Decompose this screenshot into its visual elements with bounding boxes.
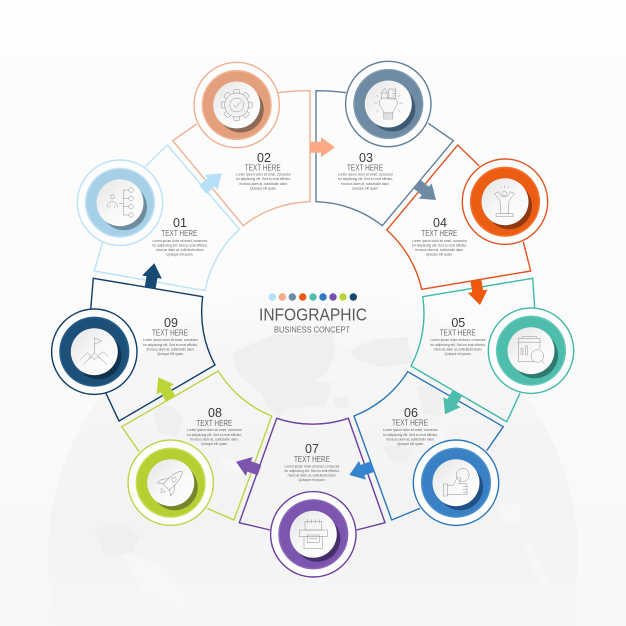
text 05: Quisque elit quam. <box>444 352 472 356</box>
text 01 <box>152 216 208 257</box>
text 09 <box>143 316 199 356</box>
icon: mountain with flag <box>80 338 108 365</box>
outline 09 <box>91 278 215 421</box>
text 04: tur adipiscing elit. Sed eu erat efficitur, <box>412 244 467 248</box>
text 08 <box>187 406 243 446</box>
ring 09 <box>52 309 137 394</box>
arrow 03 <box>410 176 442 208</box>
outline 04 <box>387 145 531 289</box>
text 05: tur adipiscing elit. Sed eu erat efficitur, <box>430 343 486 347</box>
arrow 02 <box>310 137 335 157</box>
outline 02 <box>173 91 310 226</box>
outline 05 <box>411 278 535 422</box>
text 09: tur adipiscing elit. Sed eu erat efficitur, <box>143 343 198 347</box>
text 06: TEXT HERE <box>392 419 428 428</box>
text 06: 06 <box>404 406 418 420</box>
text 08: 08 <box>208 406 222 420</box>
outline 06 <box>354 372 503 520</box>
icon: person on podium <box>494 186 514 217</box>
text 04: 04 <box>433 216 447 230</box>
text 06: Quisque elit quam. <box>397 442 424 446</box>
text 03: TEXT HERE <box>347 164 383 173</box>
text 04 <box>412 216 468 257</box>
ring 04 <box>462 159 548 244</box>
text 07: TEXT HERE <box>294 455 330 464</box>
text 01: tur adipiscing elit. Sed eu erat efficitur, <box>152 244 208 248</box>
text 06 <box>383 406 439 446</box>
arrow 09 <box>140 262 164 290</box>
colour dots <box>269 293 357 301</box>
text 04: Lorem ipsum dolor sit amet, consectur <box>412 239 468 243</box>
text 05: 05 <box>451 316 465 330</box>
panel 02 <box>173 62 310 226</box>
ring 08 <box>128 440 213 525</box>
arrow 01 <box>196 166 228 197</box>
arrow 05 <box>436 388 466 419</box>
text 02 <box>236 151 292 190</box>
text 04: Quisque elit quam. <box>426 253 453 257</box>
text 03: Quisque elit quam. <box>352 186 379 190</box>
text 02: Quisque elit quam. <box>250 186 277 190</box>
arrow 06 <box>346 457 376 484</box>
icon: report with magnifier <box>518 337 544 364</box>
text 02: Lorem ipsum dolor sit amet, consectur <box>236 173 292 177</box>
text 06: rhoncus diam at, sollicitudin diam. <box>386 437 435 441</box>
text 08: TEXT HERE <box>196 419 232 428</box>
text 01: 01 <box>173 216 187 230</box>
text 08: tur adipiscing elit. Sed eu erat efficitur, <box>187 433 242 437</box>
text 03 <box>338 151 394 190</box>
text 02: 02 <box>257 151 271 165</box>
text 03: tur adipiscing elit. Sed eu erat efficitur, <box>338 177 393 181</box>
text 07: tur adipiscing elit. Sed eu erat efficitur, <box>284 469 340 473</box>
panel 04 <box>387 145 548 289</box>
text 09: rhoncus diam at, sollicitudin diam. <box>146 347 195 351</box>
text 08: Quisque elit quam. <box>201 442 228 446</box>
outline 08 <box>122 371 272 520</box>
text 07: rhoncus diam at, sollicitudin diam. <box>288 474 336 478</box>
text 03: 03 <box>359 151 373 165</box>
outline 01 <box>94 145 239 291</box>
ring 07 <box>271 492 356 577</box>
ring 03 <box>346 61 431 147</box>
icon: calendar organiser <box>299 519 327 548</box>
text 07: 07 <box>305 442 319 456</box>
text 09: Quisque elit quam. <box>157 352 184 356</box>
text 02: tur adipiscing elit. Sed eu erat efficitur, <box>236 177 291 181</box>
panel 07 <box>239 418 385 577</box>
text 04: rhoncus diam at, sollicitudin diam. <box>415 248 464 252</box>
ring 02 <box>194 62 279 148</box>
panel 06 <box>354 372 503 525</box>
text 06: Lorem ipsum dolor sit amet, consectur <box>383 428 439 432</box>
arrow 08 <box>150 372 179 404</box>
text 01: Quisque elit quam. <box>166 253 194 257</box>
text 01: TEXT HERE <box>161 229 197 238</box>
arrow 07 <box>233 452 263 480</box>
icon: bulb with pencil and ruler <box>374 88 403 119</box>
text 03: Lorem ipsum dolor sit amet, consectur <box>338 173 394 177</box>
text 03: rhoncus diam at, sollicitudin diam. <box>341 182 390 186</box>
ring 05 <box>488 308 574 393</box>
text 05: Lorem ipsum dolor sit amet, consectur <box>430 338 486 342</box>
text 02: rhoncus diam at, sollicitudin diam. <box>239 182 288 186</box>
ring 06 <box>413 440 499 525</box>
text 01: rhoncus diam at, sollicitudin diam. <box>156 248 204 252</box>
central title block <box>259 293 367 334</box>
text 06: tur adipiscing elit. Sed eu erat efficitur, <box>383 433 438 437</box>
outline 03 <box>316 91 453 226</box>
text 05: TEXT HERE <box>440 329 476 338</box>
text 09: TEXT HERE <box>152 329 188 338</box>
title: INFOGRAPHIC <box>259 305 367 325</box>
icon: rocket <box>154 465 189 499</box>
text 05 <box>430 316 486 356</box>
text 08: Lorem ipsum dolor sit amet, consectur <box>187 428 243 432</box>
panel 09 <box>52 278 215 421</box>
panel 05 <box>411 278 574 422</box>
text 09: Lorem ipsum dolor sit amet, consectur <box>143 338 199 342</box>
text 07: Lorem ipsum dolor sit amet, consectur <box>284 464 340 468</box>
text 01: Lorem ipsum dolor sit amet, consectur <box>152 239 208 243</box>
text 09: 09 <box>164 316 178 330</box>
subtitle: BUSINESS CONCEPT <box>274 325 350 334</box>
text 08: rhoncus diam at, sollicitudin diam. <box>190 437 239 441</box>
text 04: TEXT HERE <box>421 229 457 238</box>
globe with world map <box>48 290 578 626</box>
panel 03 <box>316 61 453 226</box>
panel 01 <box>77 145 239 291</box>
icon: org tree <box>107 188 133 217</box>
text 07: Quisque elit quam. <box>298 478 326 482</box>
panel 08 <box>122 371 272 525</box>
icon: thumbs up with coin <box>443 468 469 496</box>
text 07 <box>284 442 340 482</box>
outline 07 <box>239 418 385 530</box>
arrow 04 <box>466 279 490 307</box>
text 02: TEXT HERE <box>245 164 281 173</box>
icon: gear <box>221 90 252 120</box>
text 05: rhoncus diam at, sollicitudin diam. <box>434 347 482 351</box>
ring 01 <box>77 160 163 245</box>
